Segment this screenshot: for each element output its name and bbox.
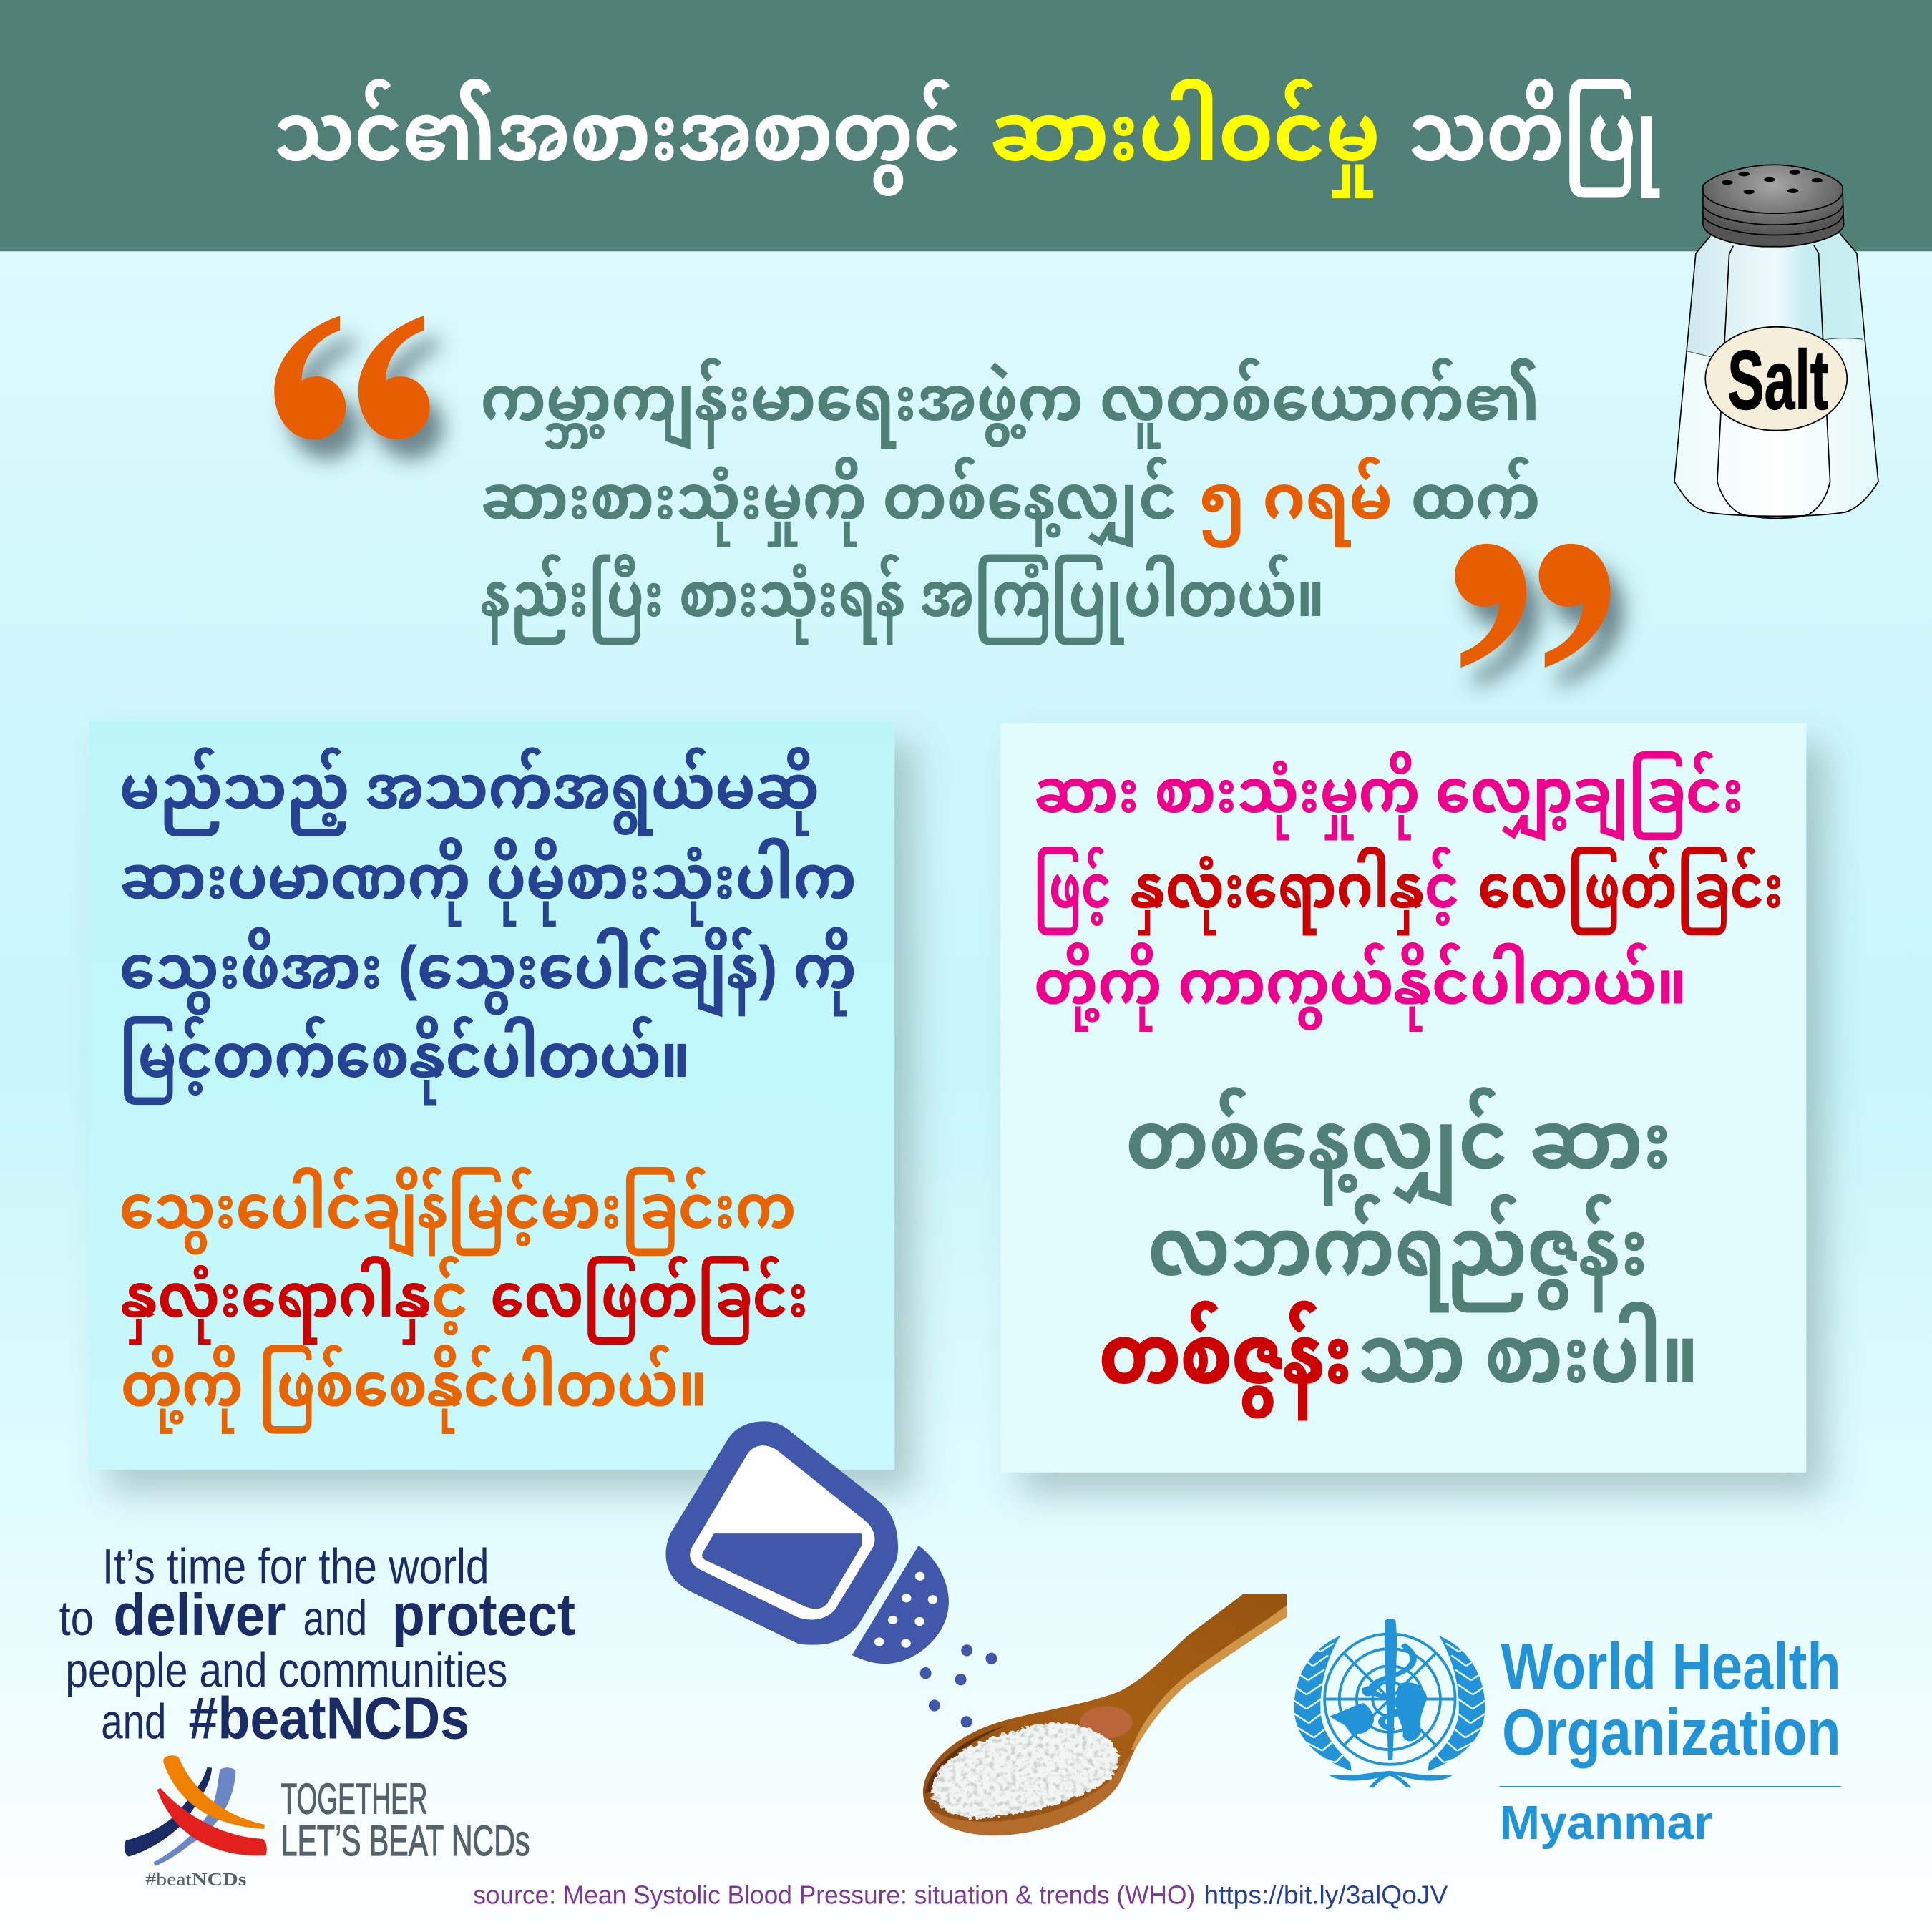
slogan text: to [59,1591,94,1646]
quote text: ၅ ဂရမ် [1198,456,1392,548]
slogan text: It’s time for the world [102,1539,489,1594]
prevention text: နှလုံးရောဂါနှင့် [1131,846,1460,935]
closing quote mark [1455,544,1611,668]
risk explanation text: ဆားပမာဏကို ပိုမိုစားသုံးပါက [119,836,857,926]
logo: together let's beat NCDs: #beat NCDs [145,1869,246,1890]
logo: together let's beat NCDs [125,1755,530,1890]
title: သတိပြု [1408,79,1660,198]
source line: https://bit.ly/3alQoJV [1204,1880,1448,1909]
hypertension consequence text: သွေးပေါင်ချိန်မြင့်မားခြင်းက [119,1166,796,1257]
quote text: ဆားစားသုံးမှုကို တစ်နေ့လျှင် [481,456,1176,549]
hypertension consequence text: လေဖြတ်ခြင်း [490,1255,809,1345]
prevention text: တို့ကို ကာကွယ်နိုင်ပါတယ်။ [1034,942,1687,1032]
panel: reduce salt advice [1000,723,1806,1473]
source line: source: Mean Systolic Blood Pressure: situation & trends (WHO) [473,1880,1195,1909]
prevention text: ဆား စားသုံးမှုကို လျှော့ချခြင်း [1034,751,1744,841]
slogan text: deliver [113,1581,286,1648]
logo: together let's beat NCDs: LET’S BEAT NCDs [281,1816,530,1865]
WHO wordmark: Myanmar [1500,1796,1712,1850]
slogan text: people and communities [65,1642,507,1697]
icon: salt shaker with label: Salt [1727,333,1828,427]
hypertension consequence text: တို့ကို ဖြစ်စေနိုင်ပါတယ်။ [121,1345,707,1434]
one teaspoon recommendation: တစ်နေ့လျှင် ဆား [1126,1087,1672,1206]
risk explanation text: သွေးဖိအား (သွေးပေါင်ချိန်) ကို [119,927,857,1017]
logo: together let's beat NCDs: TOGETHER [281,1775,428,1823]
prevention text: လေဖြတ်ခြင်း [1478,846,1784,935]
title [273,79,1660,198]
risk explanation text [119,747,857,1105]
one teaspoon recommendation: တစ်ဇွန်း [1099,1302,1352,1420]
prevention text [1034,751,1784,1032]
header band [0,0,1932,251]
slogan text: protect [392,1581,575,1648]
WHO wordmark: Organization [1502,1696,1841,1769]
one teaspoon recommendation: လဘက်ရည်ဇွန်း [1148,1194,1649,1312]
slogan text: and [101,1694,166,1750]
slogan text: #beatNCDs [188,1685,469,1752]
hypertension consequence text: နှလုံးရောဂါနှင့် [121,1255,468,1345]
one teaspoon recommendation: သာ စားပါ။ [1358,1302,1699,1400]
logo: World Health Organization Myanmar [1291,1619,1841,1850]
hypertension consequence text [119,1166,809,1434]
icon: pouring salt shaker [666,1421,997,1728]
slogan text [59,1539,575,1752]
one teaspoon recommendation [1099,1087,1699,1420]
WHO wordmark [1500,1630,1841,1850]
prevention text: ဖြင့် [1034,846,1111,935]
risk explanation text: မြင့်တက်စေနိုင်ပါတယ်။ [119,1015,690,1105]
WHO wordmark: World Health [1501,1630,1841,1703]
quote text: ကမ္ဘာ့ကျန်းမာရေးအဖွဲ့က လူတစ်ယောက်၏ [481,357,1540,450]
slogan text: and [303,1591,367,1646]
quote text: နည်းပြီး စားသုံးရန် အကြံပြုပါတယ်။ [481,553,1324,645]
quote text: ထက် [1411,456,1540,532]
title: ဆားပါဝင်မှု [990,79,1380,198]
title: သင်၏အစားအစာတွင် [273,79,961,196]
icon: wooden spoon of salt [923,1594,1287,1835]
WHO emblem [1291,1619,1489,1787]
icon: salt shaker with label [1674,165,1878,518]
panel: health risks [89,721,894,1470]
risk explanation text: မည်သည့် အသက်အရွယ်မဆို [119,747,819,836]
quote text [481,357,1540,645]
opening quote mark [274,316,430,439]
